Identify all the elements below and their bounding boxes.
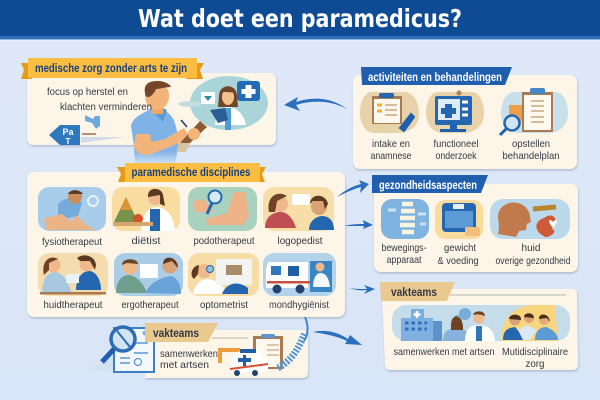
card: diëtist: diëtist bbox=[132, 235, 161, 247]
card: podotherapeut bbox=[188, 187, 257, 247]
panel: medische zorg zonder arts te zijn bbox=[21, 58, 276, 165]
illustration: doctor bbox=[178, 76, 268, 130]
tab heading: vakteams bbox=[380, 282, 455, 301]
icon: treatment plan clipboard bbox=[500, 88, 568, 135]
illustration: ambulance with clipboard and coil bbox=[220, 317, 308, 376]
label: bewegingsapparaat bbox=[382, 242, 427, 266]
label: functioneel onderzoek bbox=[434, 138, 478, 162]
icon: spine bbox=[381, 199, 429, 239]
panel: paramedische disciplines bbox=[27, 163, 345, 317]
icon: price tag Pa bbox=[49, 115, 124, 146]
card: logopedist: logopedist bbox=[278, 235, 323, 247]
tab heading: vakteams bbox=[145, 323, 218, 342]
label: gewicht & voeding: gewicht bbox=[444, 242, 476, 254]
icon: intake clipboard bbox=[360, 92, 419, 133]
label: samenwerken met artsen: samenwerken met artsen bbox=[394, 346, 495, 358]
panel: vakteams right bbox=[380, 282, 578, 370]
card: fysiotherapeut bbox=[38, 187, 106, 248]
card: huidtherapeut bbox=[38, 253, 108, 311]
label: opstellen behandelplan bbox=[502, 138, 560, 162]
text: samenwerken met artsen bbox=[160, 348, 218, 371]
arrow: disciplines to gezondheidsaspecten lower bbox=[344, 220, 373, 229]
icon: price tag Pa: Pa bbox=[62, 127, 74, 137]
focus text: focus op herstel en bbox=[47, 86, 128, 98]
label: huid overige gezondheid: huid bbox=[522, 242, 541, 254]
ribbon heading: medische zorg: medische zorg zonder arts te zijn bbox=[35, 63, 187, 75]
ribbon heading: activiteiten bbox=[361, 67, 512, 85]
ribbon heading: disciplines: paramedische disciplines bbox=[132, 167, 250, 179]
panel: activiteiten en behandelingen bbox=[353, 67, 577, 169]
label: huid overige gezondheid: overige gezondheid bbox=[496, 255, 571, 267]
label: gewicht & voeding bbox=[438, 242, 479, 267]
card: optometrist: optometrist bbox=[200, 299, 248, 311]
card: logopedist bbox=[263, 187, 334, 247]
label: gewicht & voeding: & voeding bbox=[438, 255, 479, 267]
ribbon heading: gezondheidsaspecten: gezondheidsaspecten bbox=[379, 180, 477, 192]
text: samenwerken met artsen: samenwerken bbox=[160, 348, 218, 360]
icon: magnifier and document bbox=[90, 323, 154, 372]
ribbon heading: medische zorg bbox=[21, 58, 204, 79]
focus text bbox=[47, 86, 152, 113]
ribbon heading: disciplines bbox=[117, 163, 266, 182]
label: multidisciplinaire zorg: Mutidisciplinaire bbox=[502, 346, 568, 358]
label: bewegingsapparaat: apparaat bbox=[386, 254, 422, 266]
card: huidtherapeut: huidtherapeut bbox=[44, 299, 103, 311]
label: intake en anamnese: anamnese bbox=[370, 150, 412, 162]
title: Wat doet een paramedicus? bbox=[138, 4, 462, 33]
panel: gezondheidsaspecten bbox=[372, 175, 578, 272]
label: huid overige gezondheid bbox=[496, 242, 571, 267]
card: mondhygiënist: mondhygiënist bbox=[269, 299, 329, 311]
card: optometrist bbox=[188, 253, 259, 311]
card: ergotherapeut bbox=[114, 253, 183, 311]
icon: functional exam monitor bbox=[426, 90, 484, 133]
card: diëtist bbox=[112, 187, 180, 247]
arrow: activities to zorg bbox=[284, 97, 347, 111]
ribbon heading: gezondheidsaspecten bbox=[372, 175, 488, 193]
card: podotherapeut: podotherapeut bbox=[194, 235, 255, 247]
ribbon heading: activiteiten: activiteiten en behandelingen bbox=[368, 72, 502, 84]
label: functioneel onderzoek: onderzoek bbox=[436, 150, 477, 162]
icon: price tag Pa: T bbox=[66, 137, 71, 146]
card: mondhygiënist bbox=[263, 253, 336, 311]
icon: head and heart bbox=[490, 199, 570, 239]
arrow: disciplines to vakteams bbox=[349, 285, 375, 294]
arrow: bottom panel to vakteams bbox=[313, 331, 362, 345]
card: fysiotherapeut: fysiotherapeut bbox=[42, 236, 102, 248]
card: ergotherapeut: ergotherapeut bbox=[122, 299, 179, 311]
icon: scale bbox=[435, 200, 483, 239]
label: intake en anamnese bbox=[370, 138, 412, 162]
label: intake en anamnese: intake en bbox=[372, 138, 410, 150]
text: samenwerken met artsen: met artsen bbox=[160, 359, 209, 371]
focus text: klachten verminderen bbox=[60, 101, 152, 113]
tab heading: vakteams: vakteams bbox=[391, 287, 437, 299]
label: multidisciplinaire zorg bbox=[502, 346, 568, 370]
panel: vakteams bottom bbox=[90, 317, 308, 378]
header banner bbox=[0, 0, 600, 40]
arrow: disciplines to gezondheidsaspecten upper bbox=[337, 180, 369, 197]
label: opstellen behandelplan: opstellen bbox=[512, 138, 550, 150]
illustration: nurse writing on clipboard bbox=[131, 81, 207, 165]
label: multidisciplinaire zorg: zorg bbox=[526, 358, 545, 370]
label: opstellen behandelplan: behandelplan bbox=[502, 150, 560, 162]
label: bewegingsapparaat: bewegings- bbox=[382, 242, 427, 254]
illustration: hospital and doctors bbox=[392, 305, 570, 341]
label: functioneel onderzoek: functioneel bbox=[434, 138, 478, 150]
tab heading: vakteams: vakteams bbox=[153, 328, 199, 340]
